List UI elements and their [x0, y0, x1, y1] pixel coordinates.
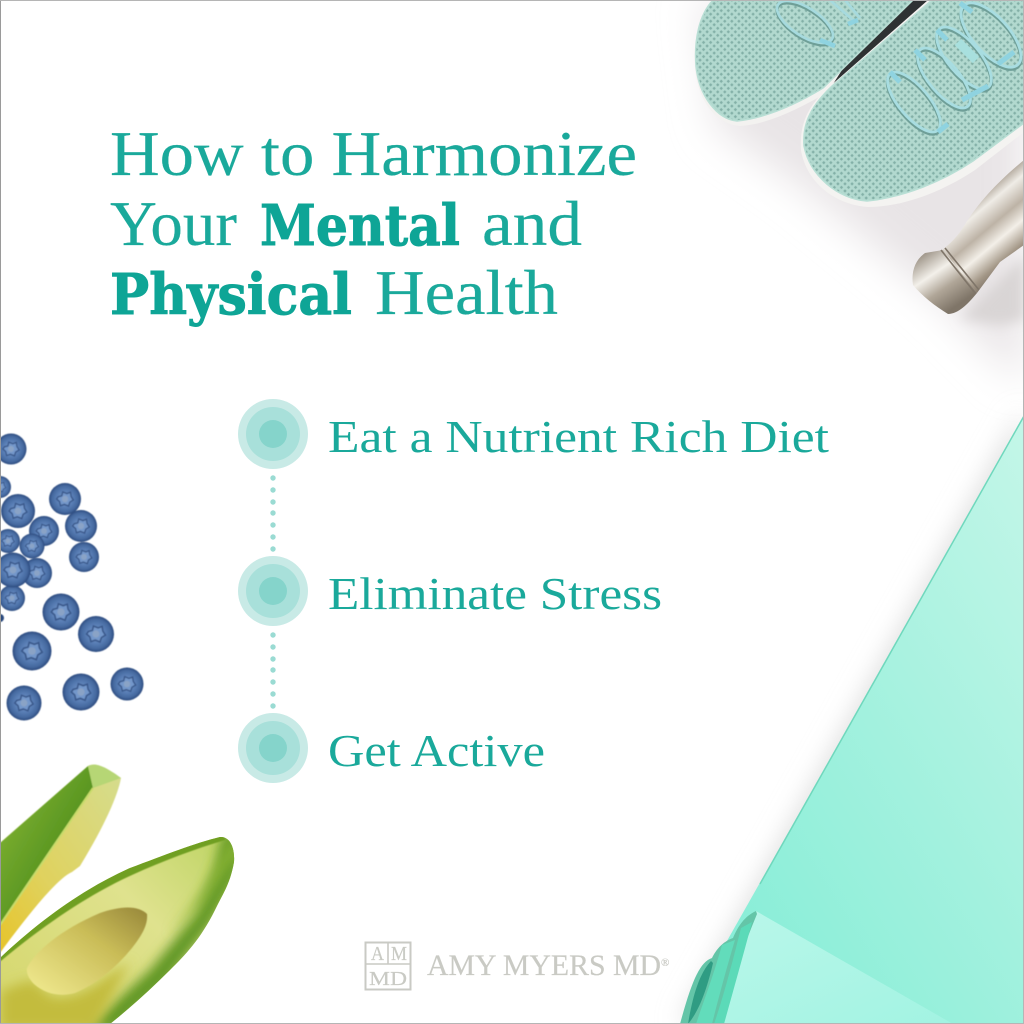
avocado pit hollow [27, 908, 147, 995]
skin band lower right [92, 837, 234, 1023]
right shoe [801, 0, 1024, 207]
mat roll edge [680, 911, 757, 1024]
title line 2: and: and [482, 189, 582, 259]
title line 2: Your: Your [110, 189, 237, 259]
title line 1: How to Harmonize [110, 119, 637, 189]
laces [879, 0, 1024, 142]
step list [238, 399, 829, 783]
logo: Amy Myers MD [365, 942, 669, 990]
blueberries [0, 434, 144, 720]
step marker 2 [238, 556, 308, 626]
skin band upper edge [0, 834, 225, 966]
yoga mat [680, 416, 1024, 1024]
water bottle [912, 160, 1024, 314]
avocado half: large [0, 830, 240, 1024]
dotted connector 1 [270, 475, 276, 552]
logo monogram box: MD [369, 968, 407, 990]
dotted connector 2 [270, 632, 276, 709]
step text 1: Eat a Nutrient Rich Diet [328, 411, 829, 462]
step text 3: Get Active [328, 725, 545, 776]
logo monogram box [365, 942, 411, 990]
avocado slice: small [0, 765, 121, 953]
logo monogram box: A [371, 943, 384, 965]
registered mark: ® [661, 957, 669, 969]
bottle shadow [960, 255, 1024, 325]
laces [771, 0, 860, 53]
step text 2: Eliminate Stress [328, 568, 662, 619]
olive flesh lower [0, 962, 130, 1024]
soft shadows [680, 0, 1024, 1024]
logo monogram box: M [391, 943, 407, 965]
logo wordmark: AMY MYERS MD [427, 949, 661, 982]
step marker 1 [238, 399, 308, 469]
mat rolled underside [712, 911, 953, 1024]
step marker 3 [238, 713, 308, 783]
title [110, 119, 637, 328]
title line 2: Mental: Mental [260, 193, 460, 259]
title line 3: Physical: Physical [110, 262, 352, 328]
left shoe [695, 0, 932, 126]
title line 3: Health: Health [375, 258, 558, 328]
